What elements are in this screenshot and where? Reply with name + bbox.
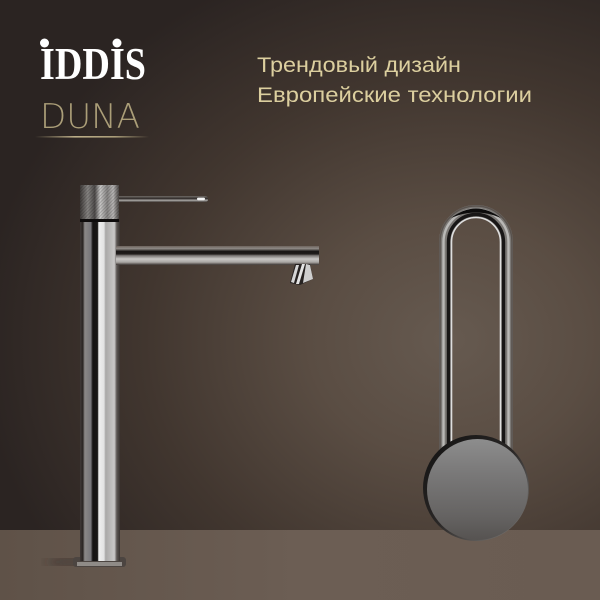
faucet column [80,222,120,561]
faucet front view [423,206,529,541]
floor surface [0,530,600,600]
loop handle [440,206,512,455]
faucet side view [46,185,319,567]
faucet aerator [290,264,313,285]
logo: IDDIS: IDDIS [40,38,146,89]
faucet lever [119,196,208,202]
tagline: Трендовый дизайн [257,54,461,77]
tagline: Европейские технологии [257,84,532,107]
tagline [257,54,532,107]
divider under series name [35,136,149,138]
faucet base [73,557,126,567]
round disc rim [423,435,529,541]
faucet spout [116,246,319,265]
loop top highlight [451,208,501,218]
round disc face [427,439,528,540]
faucet knurled handle [80,185,119,222]
faucet shadow [46,559,94,565]
series name: DUNA: DUNA [40,97,140,137]
